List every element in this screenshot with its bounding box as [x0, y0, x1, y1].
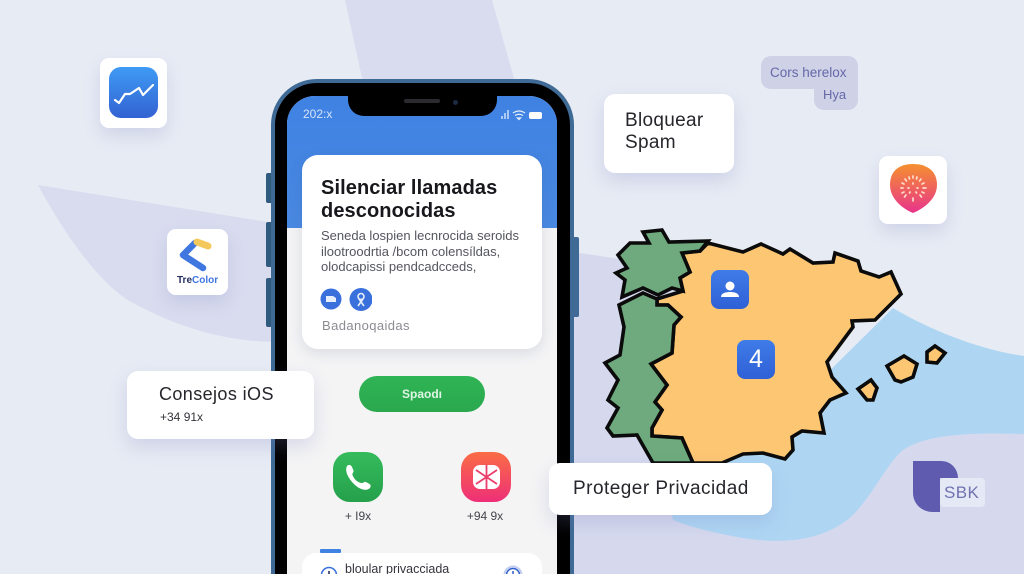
callout text: Bloquear — [625, 110, 703, 131]
bubble text line 1: Cors herelox — [770, 65, 847, 80]
icon: phone app — [333, 452, 383, 502]
logo: SBK — [913, 461, 985, 512]
phone frame — [271, 79, 574, 574]
speaker — [404, 99, 440, 103]
region: Galicia — [616, 230, 708, 297]
camera — [453, 100, 458, 105]
card body text — [321, 228, 519, 274]
map badge: person — [711, 270, 749, 309]
status time: 202:x — [303, 107, 332, 121]
icon: info — [320, 566, 338, 574]
card body text: olodcapissi pendcadcceds, — [321, 259, 476, 274]
map badge: number 4: 4 — [749, 345, 763, 373]
callout phone number: +34 91x — [160, 410, 203, 424]
green button — [359, 376, 485, 412]
app tile: blue chart — [100, 58, 167, 128]
island: Menorca — [927, 346, 945, 363]
callout: Proteger Privacidad — [549, 463, 772, 515]
app tile: TreColor — [167, 229, 228, 295]
bottom card — [302, 553, 542, 574]
green button: Spaodı — [402, 387, 442, 401]
island: Mallorca — [887, 356, 917, 382]
callout title: Consejos iOS — [159, 384, 274, 404]
logo text plate: SBK — [944, 483, 979, 502]
card body text: ilootroodrtia /bcom colensíldas, — [321, 244, 500, 258]
icon: TreColor logo — [177, 238, 218, 286]
icon: rising chart — [109, 67, 158, 118]
icon: pink app — [461, 452, 511, 502]
side buttons — [266, 173, 579, 327]
logo text plate — [940, 478, 985, 507]
icon: shield — [890, 164, 937, 213]
card footer label: Badanoqaidas — [322, 318, 410, 333]
icon: clock — [504, 566, 522, 574]
map badge: number 4 — [737, 340, 775, 379]
notch — [348, 94, 497, 116]
region: Portugal — [605, 293, 693, 463]
callout text: Spam — [625, 132, 676, 153]
callout text — [625, 110, 703, 153]
card title: Silenciar llamadas — [321, 177, 497, 199]
blue tab marker — [320, 549, 341, 553]
phone screen — [287, 96, 557, 574]
card body text: Seneda lospien lecnrocida seroids — [321, 228, 519, 243]
bubble text line 2: Hya — [823, 87, 846, 102]
island: Ibiza — [858, 380, 877, 400]
label: phone number right: +94 9x — [467, 509, 503, 523]
icon: blue round buttons — [320, 288, 372, 311]
card title: desconocidas — [321, 200, 456, 222]
chat bubble — [761, 56, 858, 110]
app tile: orange shield — [879, 156, 947, 224]
callout: Consejos iOS — [127, 371, 314, 439]
main card — [302, 155, 542, 349]
region: Spain — [651, 243, 901, 463]
phone — [266, 79, 579, 574]
callout: Bloquear Spam — [604, 94, 734, 173]
blue header — [287, 96, 557, 228]
card title — [321, 177, 497, 222]
icon: TreColor logo: TreColor — [177, 275, 218, 286]
bubble shape — [761, 56, 858, 110]
label: phone number left: + I9x — [345, 509, 371, 523]
status icons — [501, 110, 542, 120]
callout text: Proteger Privacidad — [573, 478, 749, 499]
logo purple shape — [913, 461, 958, 512]
